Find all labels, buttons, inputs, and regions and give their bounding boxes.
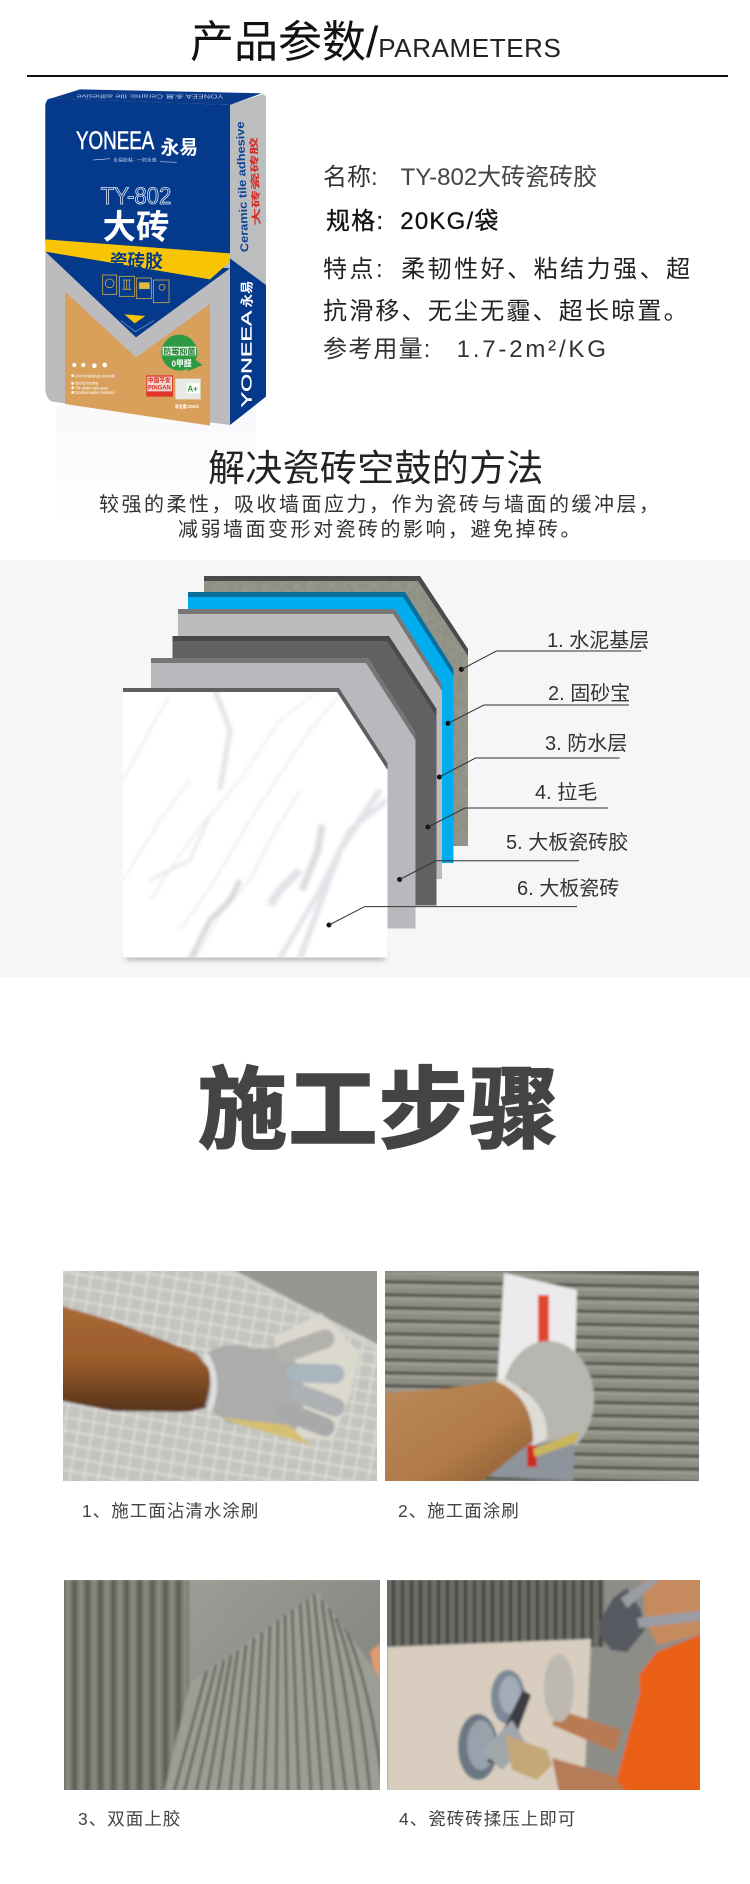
caption 4: 4、瓷砖砖揉压上即可 bbox=[399, 1809, 576, 1829]
layer 2 blue bbox=[188, 592, 454, 863]
caption 2: 2、施工面涂刷 bbox=[398, 1501, 520, 1521]
label 6 bbox=[326, 877, 619, 928]
reflection below bag bbox=[56, 405, 256, 525]
layer 1 cement base bbox=[204, 576, 468, 846]
bag feature icons bbox=[103, 275, 169, 303]
bag small text: Excellent weather resistance bbox=[75, 390, 115, 395]
bag slogan: 永易胶粘 · 一防永逸 bbox=[113, 157, 157, 164]
label 5 bbox=[397, 831, 628, 882]
label 5: 5. 大板瓷砖胶 bbox=[506, 831, 628, 854]
bag small text: Strong bonding bbox=[75, 381, 99, 386]
bag small text bbox=[71, 374, 115, 395]
spec: features line 2: 抗滑移、无尘无霾、超长晾置。 bbox=[323, 298, 690, 325]
bag green badge bbox=[161, 335, 203, 372]
bag symbols bbox=[72, 363, 107, 368]
bag green badge: 防霉抑菌 bbox=[163, 346, 196, 356]
bag logo: YONEEA bbox=[76, 127, 154, 155]
bag certificates: A+ bbox=[187, 385, 198, 394]
label 2 bbox=[446, 682, 630, 726]
bag side english: Ceramic tile adhesive bbox=[235, 121, 251, 252]
layer 6 marble tile bbox=[123, 688, 388, 960]
layer 5 gray bbox=[151, 658, 416, 928]
heading: construction steps: 施工步骤 bbox=[198, 1060, 560, 1160]
spec: size: 规格: 20KG/袋 bbox=[326, 208, 500, 235]
heading: hollow tile solution: 解决瓷砖空鼓的方法 bbox=[208, 448, 544, 489]
label 4: 4. 拉毛 bbox=[535, 781, 597, 804]
bag arrow bbox=[124, 314, 145, 323]
bag certificates: 中国平安 bbox=[148, 377, 171, 385]
panel: layered structure diagram bbox=[0, 560, 750, 977]
bag model: TY-802 bbox=[101, 183, 171, 210]
spec: usage: 参考用量: 1.7-2m²/KG bbox=[323, 336, 609, 363]
bag side logo: YONEEA bbox=[239, 310, 255, 407]
bag certificates: PINGAN bbox=[148, 385, 171, 391]
bag green badge: 0甲醛 bbox=[172, 358, 192, 369]
bag certificates bbox=[146, 375, 201, 399]
photo 4: pressing the tile bbox=[387, 1580, 700, 1790]
bag small text: Thin mixture save space bbox=[75, 385, 109, 390]
bag front blue upper bbox=[45, 98, 230, 257]
bag weight: 净含量:20KG bbox=[175, 403, 199, 410]
title: product parameters: 产品参数/PARAMETERS bbox=[190, 18, 561, 67]
bag blue chevron bbox=[45, 252, 230, 337]
caption 3: 3、双面上胶 bbox=[78, 1809, 181, 1829]
bag yellow band bbox=[45, 239, 230, 279]
bag side face upper bbox=[230, 94, 266, 285]
description line 2: 减弱墙面变形对瓷砖的影响，避免掉砖。 bbox=[178, 519, 583, 541]
layer 3 gray bbox=[178, 609, 442, 879]
title underline bbox=[27, 75, 728, 77]
photo 2: applying adhesive bbox=[385, 1271, 699, 1481]
photo 3: double-sided adhesive bbox=[64, 1580, 380, 1790]
label 2: 2. 固砂宝 bbox=[548, 682, 630, 705]
spec: name: 名称: TY-802大砖瓷砖胶 bbox=[323, 164, 597, 191]
bag logo chinese: 永易 bbox=[161, 137, 198, 159]
bag side face lower bbox=[230, 258, 266, 425]
label 4 bbox=[426, 781, 608, 830]
label 6: 6. 大板瓷砖 bbox=[517, 877, 619, 900]
bag side logo chinese: 永易 bbox=[239, 281, 254, 307]
spec: features: 特点: 柔韧性好、粘结力强、超 bbox=[323, 256, 693, 283]
bag small text: Zero formaldehyde anti-mold bbox=[75, 374, 115, 379]
bag big name: 大砖 bbox=[103, 210, 169, 247]
bag product name: 瓷砖胶 bbox=[110, 250, 163, 271]
label 1: 1. 水泥基层 bbox=[547, 629, 649, 652]
description line 1: 较强的柔性，吸收墙面应力，作为瓷砖与墙面的缓冲层， bbox=[99, 494, 662, 516]
label 3: 3. 防水层 bbox=[545, 732, 627, 755]
label 3 bbox=[437, 732, 627, 780]
bag front gray base bbox=[45, 98, 230, 425]
bag top flap text: YONEEA 永易 Ceramic tile adhesive bbox=[77, 93, 223, 101]
label 1 bbox=[459, 629, 649, 672]
layer 4 dark bbox=[172, 636, 436, 906]
caption 1: 1、施工面沾清水涂刷 bbox=[82, 1501, 259, 1521]
photo 1: wetting the surface bbox=[63, 1271, 377, 1481]
bag tan panel bbox=[65, 292, 210, 426]
bag side red name: 大砖瓷砖胶 bbox=[248, 136, 262, 226]
icon: product bag bbox=[45, 89, 266, 426]
